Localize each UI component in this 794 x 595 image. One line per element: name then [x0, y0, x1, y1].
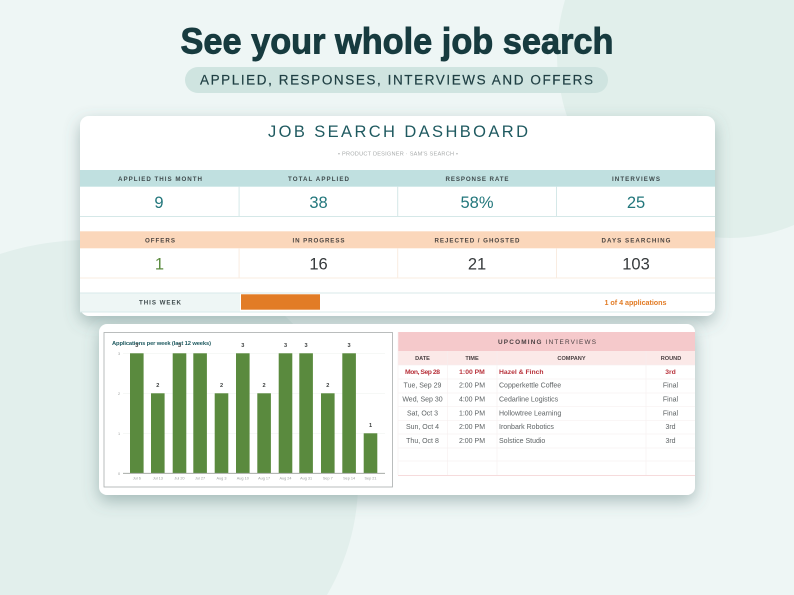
table: upcoming interviews: COMPANY — [557, 356, 586, 362]
peach KPI row: DAYS SEARCHING — [602, 238, 671, 244]
bar chart: applications per week: Jul 6 — [133, 476, 141, 480]
bar chart: applications per week: 3 — [118, 352, 120, 356]
bar chart: applications per week: Aug 3 — [217, 476, 226, 480]
bar chart: applications per week: Jul 20 — [174, 476, 185, 480]
teal KPI row: APPLIED THIS MONTH — [118, 176, 203, 183]
peach KPI row: OFFERS — [145, 238, 175, 244]
interview rows: Sat, Oct 3 — [407, 410, 438, 417]
bar chart: applications per week: Jul 27 — [195, 476, 205, 480]
interview rows: 2:00 PM — [459, 438, 485, 445]
teal KPI row: 58% — [460, 194, 494, 212]
subtitle pill: APPLIED, RESPONSES, INTERVIEWS AND OFFERS — [200, 72, 593, 88]
teal KPI row: 25 — [627, 194, 645, 212]
peach KPI row — [80, 231, 715, 278]
interview rows: Final — [663, 383, 679, 390]
teal KPI row: RESPONSE RATE — [446, 176, 508, 183]
peach KPI row: 16 — [309, 256, 328, 274]
bar chart: applications per week: 3 — [348, 343, 351, 349]
peach KPI row: IN PROGRESS — [292, 238, 344, 244]
bar chart: applications per week: Aug 31 — [300, 476, 312, 480]
interview rows: 2:00 PM — [459, 424, 485, 431]
dashboard subheading: • PRODUCT DESIGNER · SAM'S SEARCH • — [338, 152, 458, 158]
bar chart: applications per week: 3 — [305, 343, 308, 349]
table: upcoming interviews: DATE — [415, 356, 430, 362]
bar chart: applications per week: 2 — [156, 383, 159, 389]
bar chart: applications per week: 2 — [118, 392, 120, 396]
bar chart: applications per week: Aug 17 — [258, 476, 270, 480]
bar chart: applications per week: Jul 13 — [153, 476, 163, 480]
progress bar — [241, 294, 320, 310]
chart title: Applications per week (last 12 weeks) — [112, 341, 211, 347]
bar chart: applications per week: Aug 10 — [237, 476, 249, 480]
teal KPI row: 38 — [309, 194, 328, 212]
bar chart: applications per week: 3 — [241, 343, 244, 349]
bar chart: applications per week: Sep 21 — [364, 476, 377, 480]
this week progress row — [80, 292, 715, 312]
peach KPI row: 21 — [468, 256, 486, 274]
bar chart: applications per week — [104, 332, 392, 487]
bar chart: applications per week: 2 — [263, 383, 266, 389]
interview rows: Sun, Oct 4 — [406, 424, 439, 431]
bar chart: applications per week: 3 — [135, 343, 138, 349]
highlighted row: Mon, Sep 28 — [405, 369, 440, 376]
teal KPI row: 9 — [154, 194, 164, 212]
interview rows: Cedarline Logistics — [499, 396, 559, 404]
interview rows: Solstice Studio — [499, 438, 545, 445]
table: upcoming interviews: TIME — [465, 356, 479, 362]
title: See your whole job search — [180, 20, 614, 62]
highlighted row: 1:00 PM — [459, 369, 485, 376]
table heading — [398, 332, 695, 351]
interview rows: Copperkettle Coffee — [499, 383, 561, 390]
interview rows: Tue, Sep 29 — [404, 383, 442, 390]
interview rows: Hollowtree Learning — [499, 410, 561, 417]
bar chart: applications per week: 3 — [178, 343, 181, 349]
interview rows: 3rd — [665, 438, 676, 445]
teal KPI row: TOTAL APPLIED — [288, 176, 350, 183]
bar chart: applications per week: 1 — [118, 432, 120, 436]
peach KPI row: 1 — [155, 256, 164, 274]
panel: dashboard summary card — [80, 116, 715, 316]
table: upcoming interviews: UPCOMING INTERVIEWS — [498, 339, 596, 346]
interview rows: Wed, Sep 30 — [402, 396, 443, 404]
this week progress row: THIS WEEK — [139, 300, 182, 306]
teal KPI row — [80, 170, 715, 217]
bar chart: applications per week: 0 — [118, 472, 120, 476]
interview rows: 3rd — [665, 424, 676, 431]
highlighted row: 3rd — [665, 369, 676, 376]
interview rows: Final — [663, 410, 679, 417]
interview rows: 4:00 PM — [459, 396, 485, 404]
interview rows: Ironbark Robotics — [499, 424, 554, 431]
dashboard heading: JOB SEARCH DASHBOARD — [268, 123, 528, 141]
bar chart: applications per week: 2 — [326, 383, 329, 389]
highlighted row — [405, 369, 676, 376]
bar chart: applications per week: 3 — [284, 343, 287, 349]
peach KPI row: 103 — [622, 256, 650, 274]
interview rows: 1:00 PM — [459, 410, 485, 417]
bar chart: applications per week: Sep 7 — [323, 476, 333, 480]
interview rows — [402, 383, 679, 445]
bar chart: applications per week: Aug 24 — [279, 476, 292, 480]
subtitle pill — [185, 67, 608, 93]
bar chart: applications per week: Sep 14 — [343, 476, 355, 480]
interview rows: Final — [663, 396, 679, 404]
table: upcoming interviews: ROUND — [661, 356, 681, 362]
table: upcoming interviews — [398, 332, 695, 476]
interview rows: 2:00 PM — [459, 383, 485, 390]
highlighted row: Hazel & Finch — [499, 369, 544, 376]
bar chart: applications per week: 2 — [220, 383, 223, 389]
progress label: 1 of 4 applications — [604, 298, 666, 307]
teal KPI row: INTERVIEWS — [612, 176, 660, 183]
peach KPI row: REJECTED / GHOSTED — [434, 238, 520, 244]
panel: chart and interviews card — [99, 324, 695, 495]
interview rows: Thu, Oct 8 — [406, 438, 439, 445]
bar chart: applications per week: 1 — [369, 423, 372, 429]
